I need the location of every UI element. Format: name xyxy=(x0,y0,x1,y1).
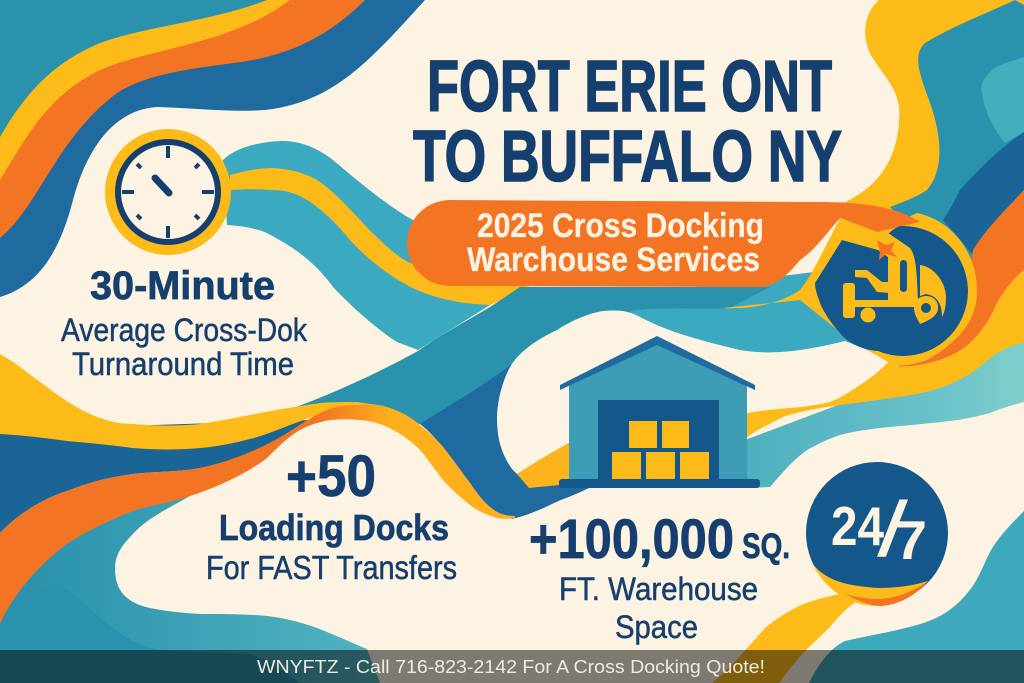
truck window slot xyxy=(900,260,907,292)
stat: warehouse space: FT. Warehouse xyxy=(559,571,758,607)
warehouse roof xyxy=(560,336,755,390)
stat: loading docks: Loading Docks xyxy=(219,507,449,548)
rear wheel xyxy=(860,308,876,322)
truck badge xyxy=(407,200,977,366)
24/7 badge: 24 xyxy=(831,495,884,557)
front wheel pin xyxy=(914,296,938,324)
wave group: yellow band right of warehouse xyxy=(747,270,1024,437)
stat: 30-minute turnaround: Turnaround Time xyxy=(72,346,294,382)
clock icon xyxy=(105,129,231,255)
wave group: central blue body xyxy=(420,345,600,519)
orange banner pill xyxy=(407,200,920,287)
wave group: lower-right light band xyxy=(745,335,1024,488)
stat: loading docks: For FAST Transfers xyxy=(206,549,457,586)
cargo boxes xyxy=(612,421,709,479)
warehouse body xyxy=(569,341,747,480)
wave group: light teal right of centre xyxy=(590,270,900,375)
cab column xyxy=(888,248,918,307)
stat: 30-minute turnaround: Average Cross-Dok xyxy=(61,312,308,348)
stat: 30-minute turnaround xyxy=(61,264,308,382)
wave group: yellow wedge behind warehouse xyxy=(517,440,590,488)
title: TO BUFFALO NY xyxy=(413,117,842,197)
wave group: cream warehouse blob xyxy=(497,310,895,474)
warehouse icon xyxy=(559,336,760,488)
cab top wedge xyxy=(840,218,910,257)
wave group: top-left ribbons xyxy=(0,0,425,297)
wave group: lower-right teal xyxy=(809,511,1024,683)
orange star xyxy=(877,240,897,260)
subtitle in banner xyxy=(467,207,764,279)
footer bar: WNYFTZ - Call 716-823-2142 For A Cross Docking Quote! xyxy=(257,657,765,677)
subtitle in banner: 2025 Cross Docking xyxy=(477,207,764,245)
stat: warehouse space: SQ. xyxy=(742,527,790,566)
footer bar xyxy=(0,650,1024,683)
stat: 30-minute turnaround: 30-Minute xyxy=(90,264,275,308)
stat: loading docks xyxy=(206,444,457,586)
stat: warehouse space xyxy=(529,507,790,645)
yellow ring and tail xyxy=(723,213,977,366)
rear block xyxy=(843,283,855,318)
24/7 badge: 7 xyxy=(895,509,927,571)
title xyxy=(413,47,842,197)
title: FORT ERIE ONT xyxy=(427,47,832,127)
blue shield circle xyxy=(815,226,968,356)
truck icon xyxy=(840,218,946,324)
wave group: clock streams xyxy=(223,141,530,350)
stat: warehouse space: +100,000 xyxy=(529,507,734,570)
warehouse base xyxy=(559,479,760,488)
front hood xyxy=(920,265,946,317)
wave group: top-right ribbons xyxy=(845,0,1024,367)
wave group: lower-left ribbons xyxy=(0,354,515,683)
wave group: lower yellow ribbon xyxy=(712,593,862,683)
24/7 badge xyxy=(806,462,948,606)
wave group: dark teal central band xyxy=(293,287,770,424)
24/7 badge: / xyxy=(877,485,908,573)
truck wheel hub xyxy=(921,303,931,313)
hook xyxy=(855,270,890,293)
warehouse door xyxy=(598,400,719,480)
subtitle in banner: Warchouse Services xyxy=(467,241,760,279)
chassis xyxy=(850,300,918,307)
stat: loading docks: +50 xyxy=(286,444,376,509)
stat: warehouse space: Space xyxy=(615,609,698,645)
